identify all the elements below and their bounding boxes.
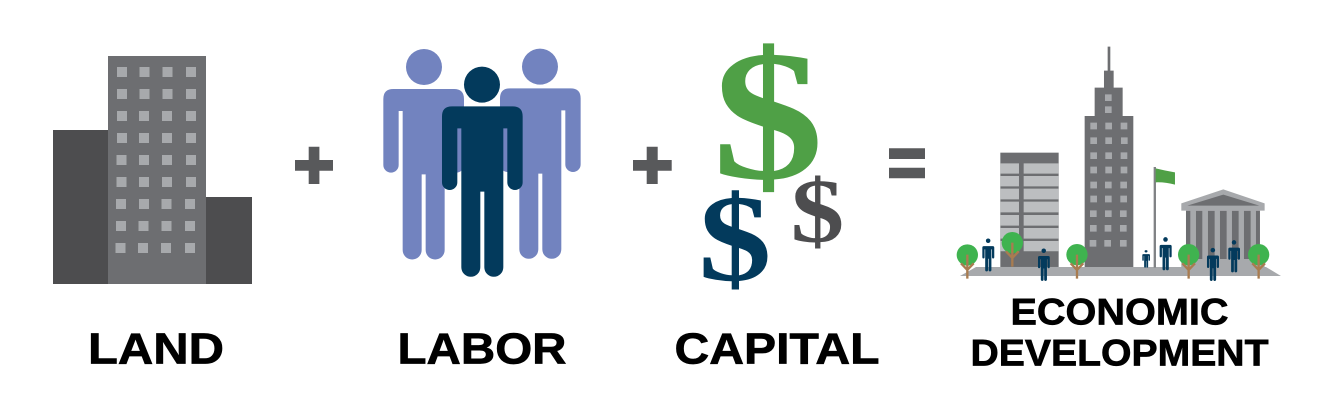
office building bbox=[1000, 153, 1059, 267]
icon: land buildings bbox=[53, 56, 252, 284]
courthouse bbox=[1181, 189, 1265, 267]
icon: equals sign bbox=[889, 148, 925, 178]
label: economic development: DEVELOPMENT bbox=[970, 333, 1269, 374]
label: economic development bbox=[970, 291, 1269, 374]
icon: gray dollar sign: $ bbox=[791, 160, 844, 262]
icon: city scene bbox=[957, 47, 1281, 281]
trees bbox=[957, 232, 1269, 279]
icon: labor people bbox=[383, 49, 581, 277]
person: right bbox=[500, 49, 581, 259]
people bbox=[982, 237, 1240, 281]
person: center bbox=[442, 67, 523, 277]
label: land: LAND bbox=[88, 325, 224, 374]
icon: plus sign bbox=[633, 147, 672, 184]
label: capital: CAPITAL bbox=[674, 325, 880, 374]
icon: navy dollar sign: $ bbox=[698, 170, 772, 307]
icon: green dollar sign: $ bbox=[712, 13, 824, 219]
flag bbox=[1154, 167, 1175, 268]
person: left bbox=[383, 49, 464, 259]
label: economic development: ECONOMIC bbox=[1010, 291, 1228, 332]
icon: plus sign bbox=[295, 147, 333, 184]
skyscraper bbox=[1085, 47, 1133, 267]
label: labor: LABOR bbox=[398, 325, 566, 374]
ground bbox=[960, 267, 1281, 276]
